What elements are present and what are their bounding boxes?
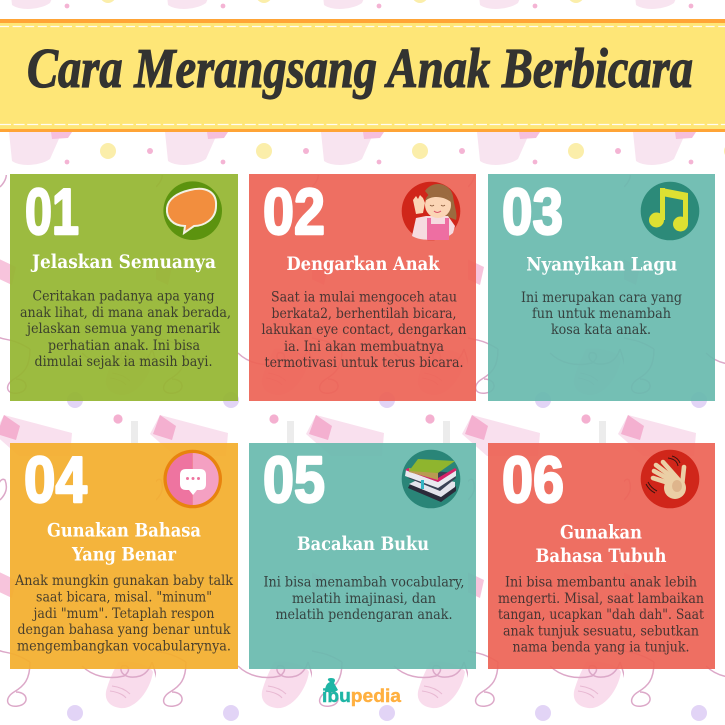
body text: Ini bisa membantu anak lebih (505, 575, 697, 591)
body text: termotivasi untuk terus bicara. (264, 355, 464, 371)
heading: Dengarkan Anak (286, 253, 440, 275)
heading: Jelaskan Semuanya (30, 251, 216, 273)
background pattern: top (0, 0, 725, 175)
heading: Yang Benar (71, 544, 177, 566)
panel 03: Nyanyikan Lagu (488, 174, 715, 401)
body text (262, 290, 467, 371)
body text: melatih imajinasi, dan (292, 591, 436, 607)
number 05: 05 (263, 443, 325, 516)
panel 02: Dengarkan Anak (249, 174, 476, 401)
body text: dengan bahasa yang benar untuk (18, 622, 231, 638)
panel 06: Gunakan Bahasa Tubuh (488, 443, 715, 669)
body text: mengembangkan vocabularynya. (17, 639, 231, 655)
body text (264, 575, 464, 623)
body text: dimulai sejak ia masih bayi. (34, 354, 212, 370)
heading: Gunakan Bahasa (47, 520, 201, 542)
icon: chat bubble (163, 450, 222, 508)
body text: anak tunjuk sesuatu, sebutkan (503, 624, 699, 640)
heading (47, 520, 201, 566)
body text: tangan, ucapkan "dah dah". Saat (498, 607, 704, 623)
body text: Ini bisa menambah vocabulary, (264, 575, 464, 591)
heading: Gunakan (560, 522, 642, 544)
number 04: 04 (24, 443, 87, 516)
icon: speech bubble (163, 181, 222, 240)
logo: ibupedia: ibupedia (322, 686, 402, 706)
body text: nama benda yang ia tunjuk. (512, 640, 690, 656)
body text (521, 290, 682, 338)
heading: Bacakan Buku (297, 533, 429, 555)
body text: fun untuk menambah (532, 306, 671, 322)
logo: ibupedia (322, 678, 402, 706)
body text (14, 573, 234, 655)
icon: waving hand (641, 450, 699, 508)
body text: berkata2, berhentilah bicara, (272, 306, 456, 322)
body text: anak lihat, di mana anak berada, (20, 305, 231, 321)
body text: Ini merupakan cara yang (521, 290, 682, 306)
body text (498, 575, 704, 656)
number 06: 06 (502, 443, 564, 516)
heading (536, 522, 667, 567)
icon: music note (641, 182, 699, 240)
heading: Bahasa Tubuh (536, 545, 667, 567)
panel 04: Gunakan Bahasa Yang Benar (10, 443, 238, 669)
body text: lakukan eye contact, dengarkan (262, 322, 467, 338)
background pattern: lower (0, 175, 725, 725)
body text: Anak mungkin gunakan baby talk (14, 573, 234, 589)
body text: jelaskan semua yang menarik (25, 321, 221, 337)
body text: Ceritakan padanya apa yang (32, 289, 215, 305)
body text: mengerti. Misal, saat lambaikan (498, 591, 704, 607)
header banner (0, 19, 725, 132)
heading: Nyanyikan Lagu (526, 254, 677, 276)
panel 01: Jelaskan Semuanya (10, 174, 238, 401)
icon: girl listening (402, 182, 460, 240)
number 01: 01 (25, 175, 79, 248)
panel 05: Bacakan Buku (249, 443, 476, 669)
body text: jadi "mum". Tetaplah respon (32, 606, 215, 622)
icon: logo figure (325, 678, 338, 692)
body text: kosa kata anak. (551, 322, 651, 338)
number 02: 02 (263, 175, 325, 248)
number 03: 03 (502, 175, 563, 248)
body text: melatih pendengaran anak. (276, 607, 452, 623)
body text: ia. Ini akan membuatnya (284, 339, 444, 355)
body text: saat bicara, misal. "minum" (36, 590, 212, 606)
body text: Saat ia mulai mengoceh atau (271, 290, 457, 306)
body text (20, 289, 231, 370)
body text: perhatian anak. Ini bisa (48, 338, 200, 354)
icon: stack of books (402, 450, 460, 508)
